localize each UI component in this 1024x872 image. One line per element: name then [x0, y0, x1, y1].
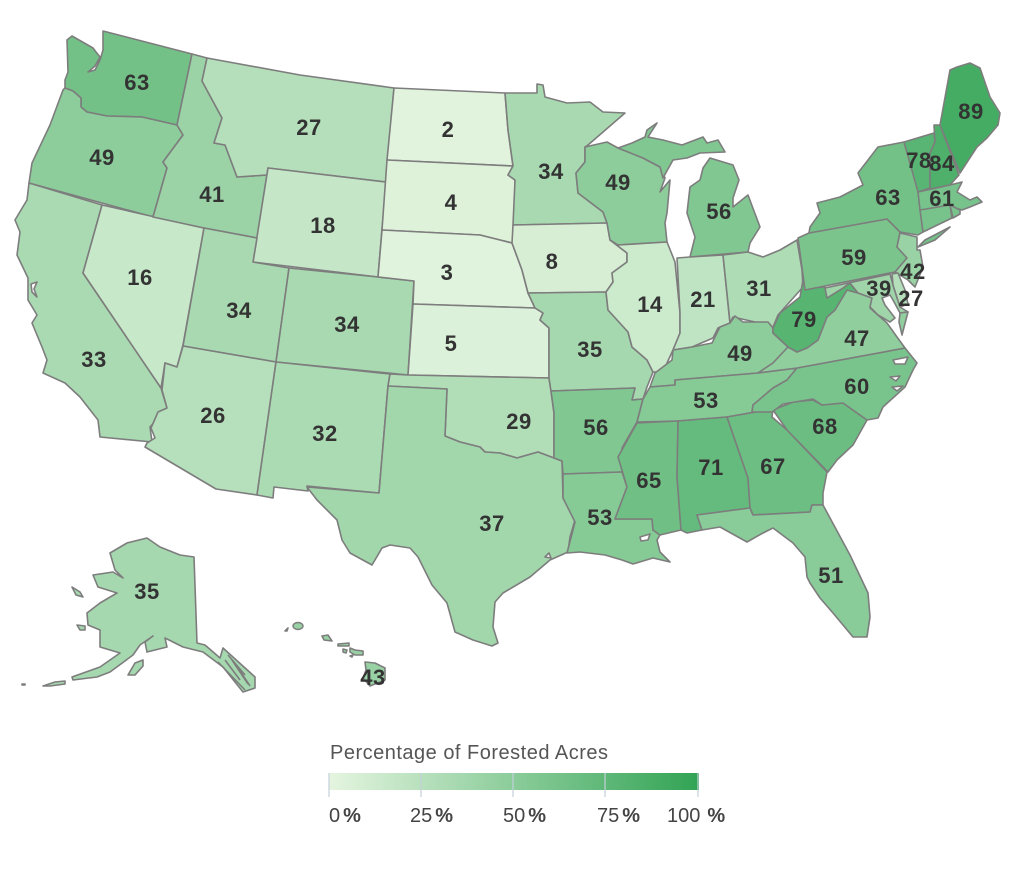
state: Iowa [512, 223, 627, 293]
value: Nebraska: 3 [441, 260, 453, 285]
value: Oregon: 49 [89, 145, 115, 170]
value: California: 33 [81, 347, 107, 372]
value: Oklahoma: 29 [506, 409, 532, 434]
value: Alabama: 71 [698, 455, 724, 480]
state: North Carolina [752, 348, 917, 420]
value: West Virginia: 79 [791, 307, 817, 332]
state: Pennsylvania [798, 219, 907, 290]
value: Maryland: 39 [866, 276, 892, 301]
value: Missouri: 35 [577, 337, 603, 362]
state: Arkansas [551, 388, 643, 474]
value: North Dakota: 2 [442, 117, 454, 142]
value: Iowa: 8 [546, 249, 558, 274]
state: Illinois [606, 240, 680, 372]
value: Illinois: 14 [637, 292, 663, 317]
state: Rhode Island [950, 205, 960, 218]
state: Utah [183, 228, 289, 362]
value: Colorado: 34 [334, 312, 360, 337]
state value labels [81, 70, 984, 690]
state: Indiana [673, 255, 730, 350]
value: Massachusetts: 61 [929, 186, 955, 211]
state: Texas [307, 386, 575, 646]
value: Minnesota: 34 [538, 159, 564, 184]
value: Vermont: 78 [906, 148, 932, 173]
state: Nevada [83, 205, 204, 388]
state: Long Island [918, 227, 950, 247]
state: Massachusetts [918, 182, 982, 210]
state: South Carolina [773, 400, 867, 472]
state: Ohio [723, 240, 803, 327]
value: Nevada: 16 [127, 265, 153, 290]
value: New Mexico: 32 [312, 421, 338, 446]
state: Alabama [677, 417, 750, 533]
value: Washington: 63 [124, 70, 150, 95]
legend tick label: 50%: 50% [503, 805, 546, 827]
legend ticks [329, 773, 698, 797]
state: Michigan upper peninsula [618, 123, 725, 178]
state: California [15, 183, 167, 442]
state: Arizona [145, 346, 276, 495]
state: Connecticut [920, 205, 952, 232]
value: Idaho: 41 [199, 182, 225, 207]
state: Maine [940, 63, 1000, 173]
state: Colorado [276, 268, 414, 375]
state: Tennessee [637, 368, 797, 422]
state: Maryland [825, 274, 908, 322]
value: Hawaii: 43 [360, 665, 386, 690]
state: New Hampshire [930, 125, 959, 189]
value: Virginia: 47 [844, 326, 870, 351]
state: New York [809, 142, 923, 235]
value: North Carolina: 60 [844, 374, 870, 399]
state: Washington [65, 31, 192, 125]
value: Delaware: 27 [898, 286, 924, 311]
state: Virginia eastern shore [899, 312, 908, 335]
value: Maine: 89 [958, 99, 984, 124]
value: Kentucky: 49 [727, 341, 753, 366]
state: Hawaii [285, 622, 385, 686]
state: Wyoming [253, 168, 386, 277]
legend tick label: 25%: 25% [410, 805, 453, 827]
state: Kansas [408, 304, 549, 378]
value: Montana: 27 [296, 115, 322, 140]
state: New Mexico [257, 362, 390, 498]
state: Mississippi [615, 421, 681, 535]
state: Missouri [528, 292, 653, 400]
value: Kansas: 5 [445, 331, 457, 356]
state: New Jersey [895, 233, 923, 287]
value: Arkansas: 56 [583, 415, 609, 440]
state: Louisiana [563, 472, 670, 564]
state: Idaho [153, 54, 267, 238]
value: Louisiana: 53 [587, 505, 613, 530]
value: New York: 63 [875, 185, 901, 210]
state: North Dakota [387, 88, 513, 166]
value: South Carolina: 68 [812, 414, 838, 439]
value: Texas: 37 [479, 511, 505, 536]
state: Nebraska [378, 230, 535, 308]
value: Wyoming: 18 [310, 213, 336, 238]
value: Utah: 34 [226, 298, 252, 323]
state: Georgia [727, 409, 827, 515]
legend color bar [329, 773, 699, 790]
value: Ohio: 31 [746, 276, 772, 301]
value: Indiana: 21 [690, 287, 716, 312]
map: state shapes [15, 31, 1000, 692]
coastal inlets [31, 282, 908, 558]
state: Vermont [904, 133, 935, 192]
value: New Jersey: 42 [900, 259, 926, 284]
state: Minnesota [505, 84, 625, 225]
state: West Virginia [773, 280, 858, 352]
state: Virginia [758, 290, 905, 373]
value: Florida: 51 [818, 563, 844, 588]
state: Oklahoma [388, 374, 554, 458]
legend title: Percentage of Forested Acres [330, 742, 608, 764]
state: Montana [202, 58, 394, 182]
state: Kentucky [650, 316, 788, 387]
value: South Dakota: 4 [445, 190, 458, 215]
value: Arizona: 26 [200, 403, 226, 428]
state: Alaska [22, 538, 255, 692]
state: Oregon [29, 88, 183, 217]
state: Delaware [892, 273, 908, 307]
value: Wisconsin: 49 [605, 170, 631, 195]
value: Alaska: 35 [134, 579, 160, 604]
legend tick label: 100%: 100 % [667, 805, 725, 827]
value: Georgia: 67 [760, 454, 786, 479]
state: Florida [697, 505, 870, 637]
legend [329, 742, 725, 827]
value: Tennessee: 53 [693, 388, 719, 413]
state: Michigan lower peninsula [687, 158, 760, 257]
value: Pennsylvania: 59 [841, 245, 867, 270]
value: Mississippi: 65 [636, 468, 662, 493]
state: Wisconsin [576, 142, 670, 245]
state: South Dakota [382, 160, 515, 243]
legend tick label: 0%: 0% [329, 805, 361, 827]
value: New Hampshire: 84 [929, 151, 955, 176]
value: Michigan: 56 [706, 199, 732, 224]
legend tick label: 75%: 75% [597, 805, 640, 827]
